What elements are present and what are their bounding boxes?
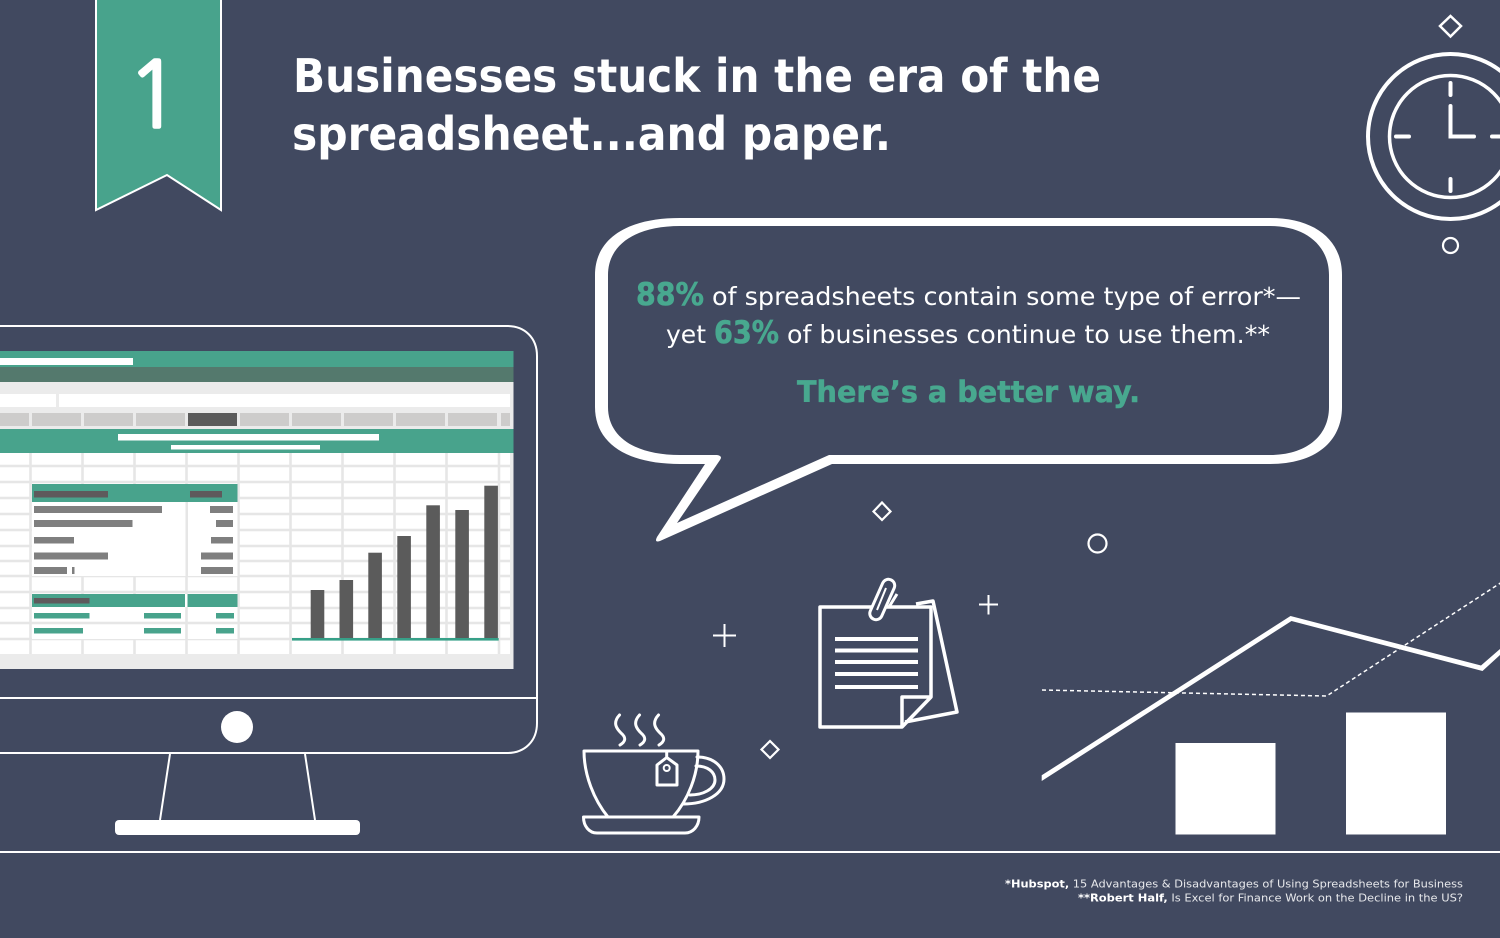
monitor frame <box>0 326 537 820</box>
line chart with bars <box>1042 582 1500 834</box>
callout text: 88% <box>636 277 704 313</box>
callout text <box>636 277 1301 409</box>
decorative marker: diamond above note <box>874 502 890 520</box>
decorative marker: plus right <box>979 595 998 614</box>
callout text: yet <box>666 320 706 349</box>
source footnotes: **Robert Half, Is Excel for Finance Work on the Decline in the US? <box>1078 892 1463 904</box>
ribbon badge with number 1: 1 <box>126 50 182 141</box>
decorative marker: diamond near cup <box>762 741 778 758</box>
ribbon badge with number 1 <box>96 0 221 210</box>
footer divider <box>0 851 1500 853</box>
spreadsheet screen <box>0 351 514 669</box>
monitor base <box>115 820 360 835</box>
decorative marker: circle <box>1088 534 1106 552</box>
title: spreadsheet...and paper. <box>292 107 891 161</box>
thick trend line <box>1042 616 1500 781</box>
decorative marker: plus left <box>713 624 736 647</box>
speech bubble <box>595 218 1342 542</box>
icon: tea cup <box>584 715 724 833</box>
bar: taller <box>1346 712 1446 834</box>
icon: clock <box>1368 54 1500 219</box>
source footnotes: *Hubspot, 15 Advantages & Disadvantages of Using Spreadsheets for Business <box>1005 878 1463 890</box>
spreadsheet table: lower <box>32 594 238 639</box>
decorative marker: circle top right <box>1443 238 1458 253</box>
dashed trend line <box>1042 582 1500 696</box>
computer monitor <box>0 326 537 835</box>
decorative marker: diamond top right <box>1440 16 1461 36</box>
title <box>292 49 1101 161</box>
bar: shorter <box>1176 743 1276 834</box>
spreadsheet table: upper <box>32 484 238 576</box>
callout text: There’s a better way. <box>797 375 1140 409</box>
icon: sticky note with paperclip <box>820 577 957 727</box>
callout text: of businesses continue to use them.** <box>787 320 1270 349</box>
spreadsheet bar chart <box>292 486 499 641</box>
callout text: of spreadsheets contain some type of error*— <box>712 282 1301 311</box>
title: Businesses stuck in the era of the <box>293 49 1101 103</box>
monitor power button <box>221 711 253 743</box>
callout text: 63% <box>714 315 779 351</box>
source footnotes <box>1005 878 1463 904</box>
